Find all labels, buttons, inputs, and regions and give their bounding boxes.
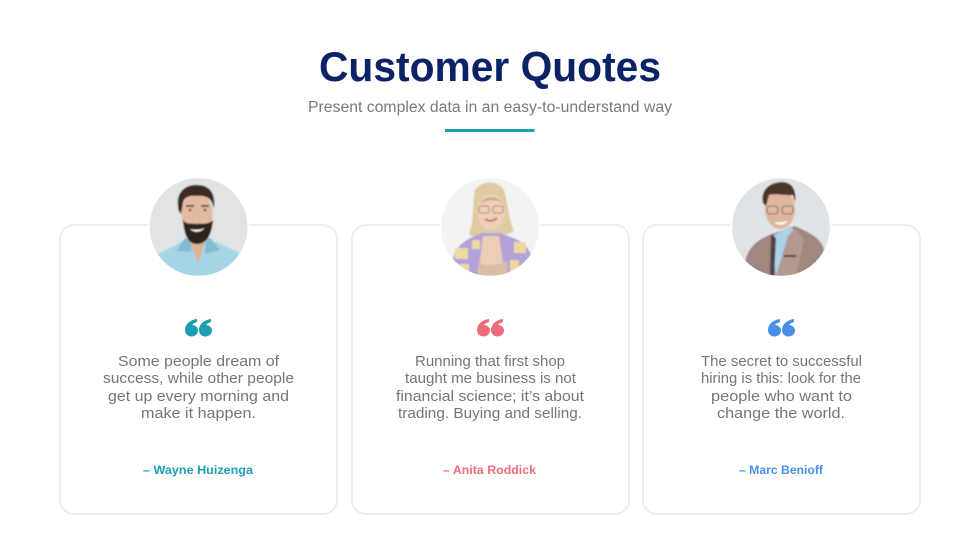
card outline: [352, 225, 629, 514]
panel: Anita Roddick quote: [352, 176, 629, 514]
portrait: man in glasses and tan blazer: [730, 176, 832, 278]
quote text: change the world.: [717, 405, 845, 422]
panel: Marc Benioff quote: [643, 176, 920, 514]
panel: Wayne Huizenga quote: [60, 176, 337, 514]
quote text: financial science; it’s about: [396, 388, 585, 405]
card outline: [60, 225, 337, 514]
quote text: get up every morning and: [108, 388, 289, 405]
icon: quotation mark: [768, 319, 795, 336]
title accent bar: [445, 129, 534, 132]
quote text: hiring is this: look for the: [701, 370, 861, 387]
quote text: The secret to successful: [701, 353, 862, 370]
quote text: [103, 353, 294, 422]
quote text: taught me business is not: [405, 370, 577, 387]
title: Customer Quotes: [319, 43, 661, 90]
attribution: – Marc Benioff: [739, 463, 824, 477]
quote text: [701, 353, 862, 422]
subtitle: Present complex data in an easy-to-understand way: [308, 99, 672, 116]
quote text: trading. Buying and selling.: [398, 405, 582, 422]
attribution: – Anita Roddick: [443, 463, 536, 477]
icon: quotation mark: [185, 319, 212, 336]
quote text: success, while other people: [103, 370, 294, 387]
quote text: people who want to: [711, 388, 852, 405]
portrait: blonde woman in plaid jacket: [440, 176, 540, 278]
card outline: [643, 225, 920, 514]
quote text: Some people dream of: [118, 353, 280, 370]
quote text: Running that first shop: [415, 353, 565, 370]
quote text: make it happen.: [141, 405, 256, 422]
quote text: [396, 353, 585, 422]
infographic: customer quotes: [59, 52, 921, 515]
icon: quotation mark: [477, 319, 504, 336]
portrait: bearded man in blue shirt: [148, 176, 249, 278]
attribution: – Wayne Huizenga: [143, 463, 253, 477]
